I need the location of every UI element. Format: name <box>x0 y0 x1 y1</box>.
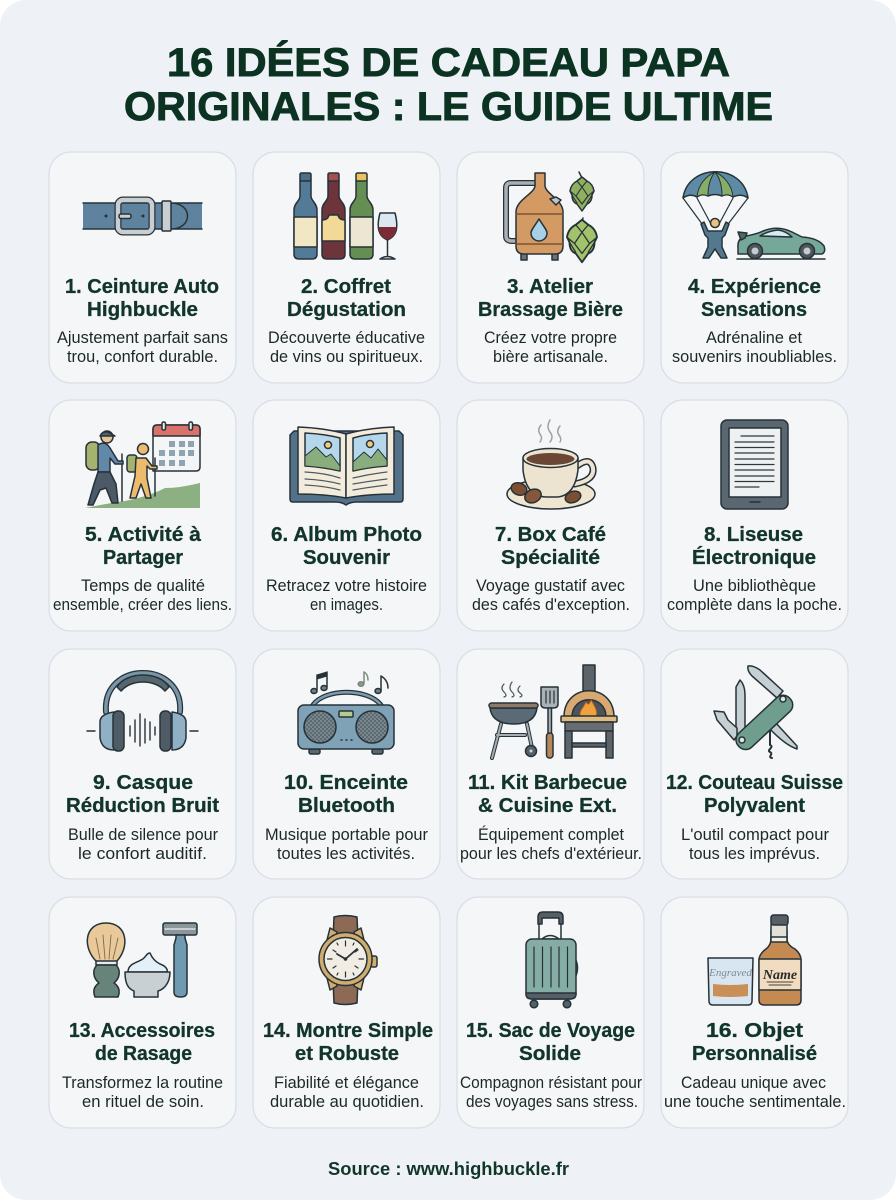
heading <box>468 771 627 817</box>
description <box>667 576 842 614</box>
heading <box>271 523 422 569</box>
panel: 11 barbecue <box>457 649 644 879</box>
heading: Brassage Bière <box>478 298 623 321</box>
panel: 9 casque <box>49 649 236 879</box>
source footer: Source : www.highbuckle.fr <box>328 1159 569 1179</box>
icon: engraved glass and bottle: Name <box>762 968 797 983</box>
heading: Highbuckle <box>87 298 198 321</box>
heading <box>85 523 202 569</box>
panel: 7 café <box>457 400 644 631</box>
panel: 1 ceinture <box>49 152 236 383</box>
description <box>664 1073 846 1111</box>
description: trou, confort durable. <box>67 347 218 366</box>
panel: 12 couteau <box>661 649 848 879</box>
description: en rituel de soin. <box>82 1092 204 1111</box>
description <box>268 328 425 366</box>
heading: 14. Montre Simple <box>263 1019 433 1042</box>
icon: coffee cup <box>507 420 595 509</box>
heading: 3. Atelier <box>507 275 593 298</box>
description: Adrénaline et <box>706 328 802 347</box>
heading <box>466 1019 635 1065</box>
icon: hikers and calendar <box>85 422 200 508</box>
icon: photo album <box>290 427 403 505</box>
description <box>68 825 218 863</box>
heading: Partager <box>103 546 183 569</box>
heading: Souvenir <box>303 546 390 569</box>
title <box>124 40 773 129</box>
description: le confort auditif. <box>78 844 207 863</box>
panel: 8 liseuse <box>661 400 848 631</box>
title: 16 IDÉES DE CADEAU PAPA <box>167 40 730 85</box>
icon: shaving brush, bowl and razor <box>87 923 197 997</box>
heading: 4. Expérience <box>688 275 821 298</box>
heading: Bluetooth <box>298 794 395 817</box>
description: Équipement complet <box>478 825 624 844</box>
heading <box>692 1019 817 1065</box>
heading <box>284 771 408 817</box>
description: des cafés d'exception. <box>472 595 630 614</box>
heading: Sensations <box>701 298 807 321</box>
heading <box>495 523 606 569</box>
heading: 13. Accessoires <box>69 1019 215 1042</box>
icon: belt <box>83 200 202 232</box>
description <box>472 576 630 614</box>
description: Compagnon résistant pour <box>460 1073 642 1092</box>
panel: 6 album <box>253 400 440 631</box>
panel: 4 sensations <box>661 152 848 383</box>
heading: Solide <box>519 1042 581 1065</box>
icon: wrist watch <box>319 916 377 1004</box>
heading: 10. Enceinte <box>284 771 408 794</box>
description <box>672 328 837 366</box>
heading: Spécialité <box>501 546 600 569</box>
heading: de Rasage <box>95 1042 192 1065</box>
heading <box>263 1019 433 1065</box>
description: de vins ou spiritueux. <box>270 347 423 366</box>
panel: 15 voyage <box>457 897 644 1128</box>
description: Créez votre propre <box>484 328 617 347</box>
panel: 10 enceinte <box>253 649 440 879</box>
description: Temps de qualité <box>81 576 205 595</box>
heading: 1. Ceinture Auto <box>65 275 219 298</box>
description: complète dans la poche. <box>667 595 842 614</box>
description: durable au quotidien. <box>270 1092 424 1111</box>
description: Bulle de silence pour <box>68 825 218 844</box>
description: Découverte éducative <box>268 328 425 347</box>
icon: headphones <box>87 673 198 751</box>
heading <box>666 771 843 817</box>
icon: barbecue, spatula and pizza oven <box>489 665 617 758</box>
description <box>62 1073 223 1111</box>
description: Musique portable pour <box>265 825 428 844</box>
panel: 2 coffret <box>253 152 440 383</box>
heading: 15. Sac de Voyage <box>466 1019 635 1042</box>
icon: engraved glass and bottle: Engraved <box>708 967 752 979</box>
description <box>484 328 617 366</box>
description: Ajustement parfait sans <box>57 328 228 347</box>
heading: & Cuisine Ext. <box>478 794 617 817</box>
description: Retracez votre histoire <box>266 576 427 595</box>
heading <box>69 1019 215 1065</box>
heading <box>478 275 623 321</box>
heading <box>688 275 821 321</box>
panel: 3 brassage <box>457 152 644 383</box>
panel: 16 objet <box>661 897 848 1128</box>
heading: et Robuste <box>295 1042 399 1065</box>
heading <box>287 275 406 321</box>
icon: bluetooth boombox <box>298 672 394 754</box>
description <box>53 576 232 614</box>
heading: 12. Couteau Suisse <box>666 771 843 794</box>
description <box>265 825 428 863</box>
description: Voyage gustatif avec <box>476 576 625 595</box>
heading: 6. Album Photo <box>271 523 422 546</box>
panel: 5 activité <box>49 400 236 631</box>
description: L'outil compact pour <box>681 825 829 844</box>
heading: 8. Liseuse <box>704 523 803 546</box>
heading: Personnalisé <box>692 1042 817 1065</box>
heading: 9. Casque <box>93 771 193 794</box>
heading <box>692 523 816 569</box>
heading: Réduction Bruit <box>66 794 219 817</box>
panel: 14 montre <box>253 897 440 1128</box>
description: toutes les activités. <box>277 844 415 863</box>
heading: 5. Activité à <box>85 523 202 546</box>
description: Une bibliothèque <box>693 576 816 595</box>
heading: Dégustation <box>287 298 406 321</box>
heading: 16. Objet <box>706 1019 803 1042</box>
description: tous les imprévus. <box>689 844 820 863</box>
description: Fiabilité et élégance <box>274 1073 419 1092</box>
description: pour les chefs d'extérieur. <box>460 844 642 863</box>
description <box>681 825 829 863</box>
title: ORIGINALES : LE GUIDE ULTIME <box>124 85 773 129</box>
description <box>57 328 228 366</box>
description <box>460 825 642 863</box>
panel: 13 rasage <box>49 897 236 1128</box>
heading: 7. Box Café <box>495 523 606 546</box>
heading: Polyvalent <box>704 794 805 817</box>
description: ensemble, créer des liens. <box>53 595 232 614</box>
description: Transformez la routine <box>62 1073 223 1092</box>
description <box>266 576 427 614</box>
icon: brewing still and hops <box>506 172 597 262</box>
icon: suitcase <box>526 912 578 1008</box>
description: bière artisanale. <box>493 347 608 366</box>
description: souvenirs inoubliables. <box>672 347 837 366</box>
description <box>270 1073 424 1111</box>
heading: 2. Coffret <box>301 275 391 298</box>
icon: e-reader <box>721 420 788 509</box>
icon: engraved glass and bottle <box>708 915 801 1005</box>
description: des voyages sans stress. <box>466 1092 638 1111</box>
heading <box>66 771 219 817</box>
heading: Électronique <box>692 546 816 569</box>
description: une touche sentimentale. <box>664 1092 846 1111</box>
description: Cadeau unique avec <box>681 1073 826 1092</box>
heading: 11. Kit Barbecue <box>468 771 627 794</box>
icon: swiss army knife <box>714 666 797 758</box>
description: en images. <box>310 595 383 614</box>
icon: parachute and car <box>683 172 825 259</box>
heading <box>65 275 219 321</box>
description <box>460 1073 642 1111</box>
icon: wine bottles and glass <box>294 173 397 259</box>
